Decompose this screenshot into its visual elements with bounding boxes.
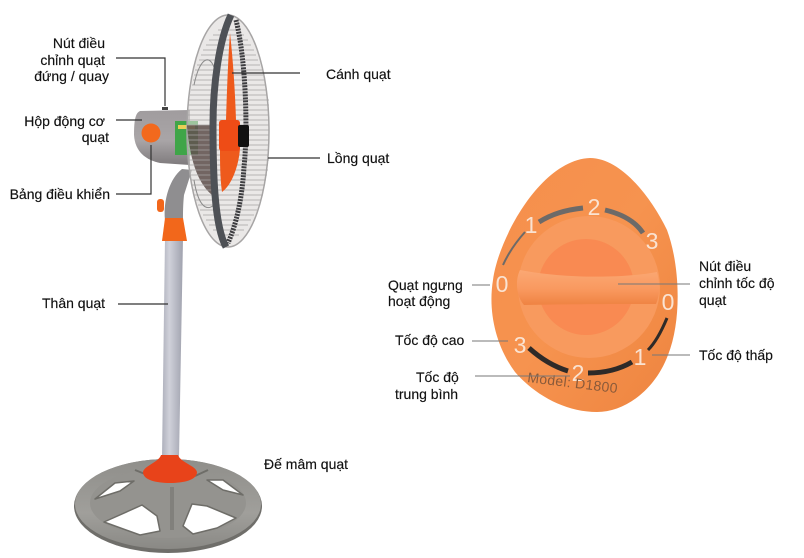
label: body: Thân quạt [42, 295, 105, 311]
tilt knob [157, 199, 164, 212]
dial numbers [496, 194, 674, 386]
dial numbers: 2 [572, 360, 584, 386]
oscillation button [162, 107, 168, 110]
label: stop: Quạt ngưng [388, 277, 463, 293]
label: guard [268, 150, 389, 166]
label: oscillation button [34, 35, 165, 106]
label: guard: Lồng quạt [327, 150, 389, 166]
label: medium speed: trung bình [395, 386, 458, 402]
label: motor box: Hộp động cơ [24, 113, 105, 129]
motor box [134, 110, 190, 165]
label: body [42, 295, 168, 311]
fan guard [187, 15, 269, 247]
speed arcs [503, 208, 667, 373]
label: medium speed: Tốc độ [416, 369, 459, 385]
dial numbers: 1 [634, 344, 646, 370]
fan illustration [74, 15, 269, 553]
model text: Model: D1800 [527, 369, 619, 396]
dial handle [517, 270, 659, 305]
fan blades [220, 33, 240, 192]
label: control panel: Bảng điều khiển [10, 186, 110, 202]
dial numbers: 3 [514, 332, 526, 358]
label: oscillation button: chỉnh quạt [40, 52, 105, 68]
label: motor box: quạt [82, 129, 109, 145]
fan hub [219, 120, 240, 151]
label: medium speed [395, 369, 570, 402]
pole collar [162, 218, 187, 241]
pole [162, 238, 183, 458]
dial inner recess [538, 239, 634, 335]
dial plate [491, 158, 678, 412]
label: speed knob: quạt [699, 292, 726, 308]
label: base: Đế mâm quạt [264, 456, 348, 472]
dial illustration [491, 158, 678, 412]
green label [175, 121, 198, 155]
label: speed knob [618, 258, 775, 308]
neck joint [165, 169, 192, 220]
label: high speed [395, 332, 508, 348]
label: low speed [652, 347, 773, 363]
control knob [142, 124, 160, 142]
label: stop [388, 277, 490, 309]
dial numbers: 1 [525, 212, 537, 238]
label: oscillation button: Nút điều [53, 35, 105, 51]
fan base [74, 459, 262, 553]
label: stop: hoạt động [388, 293, 450, 309]
label: high speed: Tốc độ cao [395, 332, 464, 348]
dial numbers: 0 [662, 289, 674, 315]
label: oscillation button: đứng / quay [34, 68, 109, 84]
dial numbers: 2 [588, 194, 600, 220]
label: low speed: Tốc độ thấp [699, 347, 773, 363]
dial numbers: 3 [646, 228, 658, 254]
base orange hub [143, 455, 197, 483]
label: speed knob: Nút điều [699, 258, 751, 274]
label: blade: Cánh quạt [326, 66, 391, 82]
label: control panel [10, 145, 151, 202]
dial numbers: 0 [496, 271, 508, 297]
fan rim [213, 15, 231, 247]
label: motor box [24, 113, 142, 145]
label: speed knob: chỉnh tốc độ [699, 275, 775, 291]
dial outer ring [518, 216, 660, 358]
